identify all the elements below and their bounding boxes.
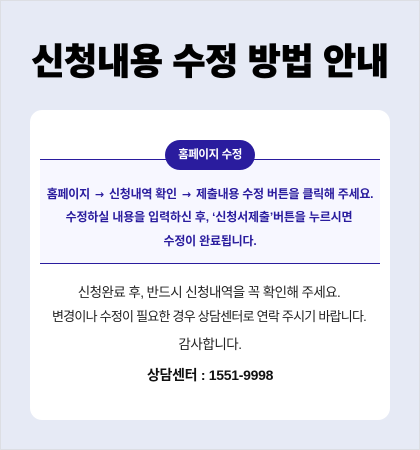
title: 신청내용 수정 방법 안내 <box>31 41 389 82</box>
panel: homepage instructions band <box>40 159 380 264</box>
contact number: 상담센터 : 1551-9998 <box>147 367 273 383</box>
badge: homepage edit: 홈페이지 수정 <box>178 149 242 161</box>
notice line 1: 신청완료 후, 반드시 신청내역을 꼭 확인해 주세요. <box>78 285 340 300</box>
instruction line 3: 수정이 완료됩니다. <box>164 234 256 248</box>
instruction line 2: 수정하실 내용을 입력하신 후, ‘신청서제출’버튼을 누르시면 <box>66 210 352 224</box>
instruction line 1: 홈페이지 → 신청내역 확인 → 제출내용 수정 버튼을 클릭해 주세요. <box>47 187 373 201</box>
thanks: 감사합니다. <box>178 337 242 352</box>
notice line 2: 변경이나 수정이 필요한 경우 상담센터로 연락 주시기 바랍니다. <box>52 309 366 324</box>
panel: white card <box>30 110 390 420</box>
badge: homepage edit <box>165 140 255 170</box>
